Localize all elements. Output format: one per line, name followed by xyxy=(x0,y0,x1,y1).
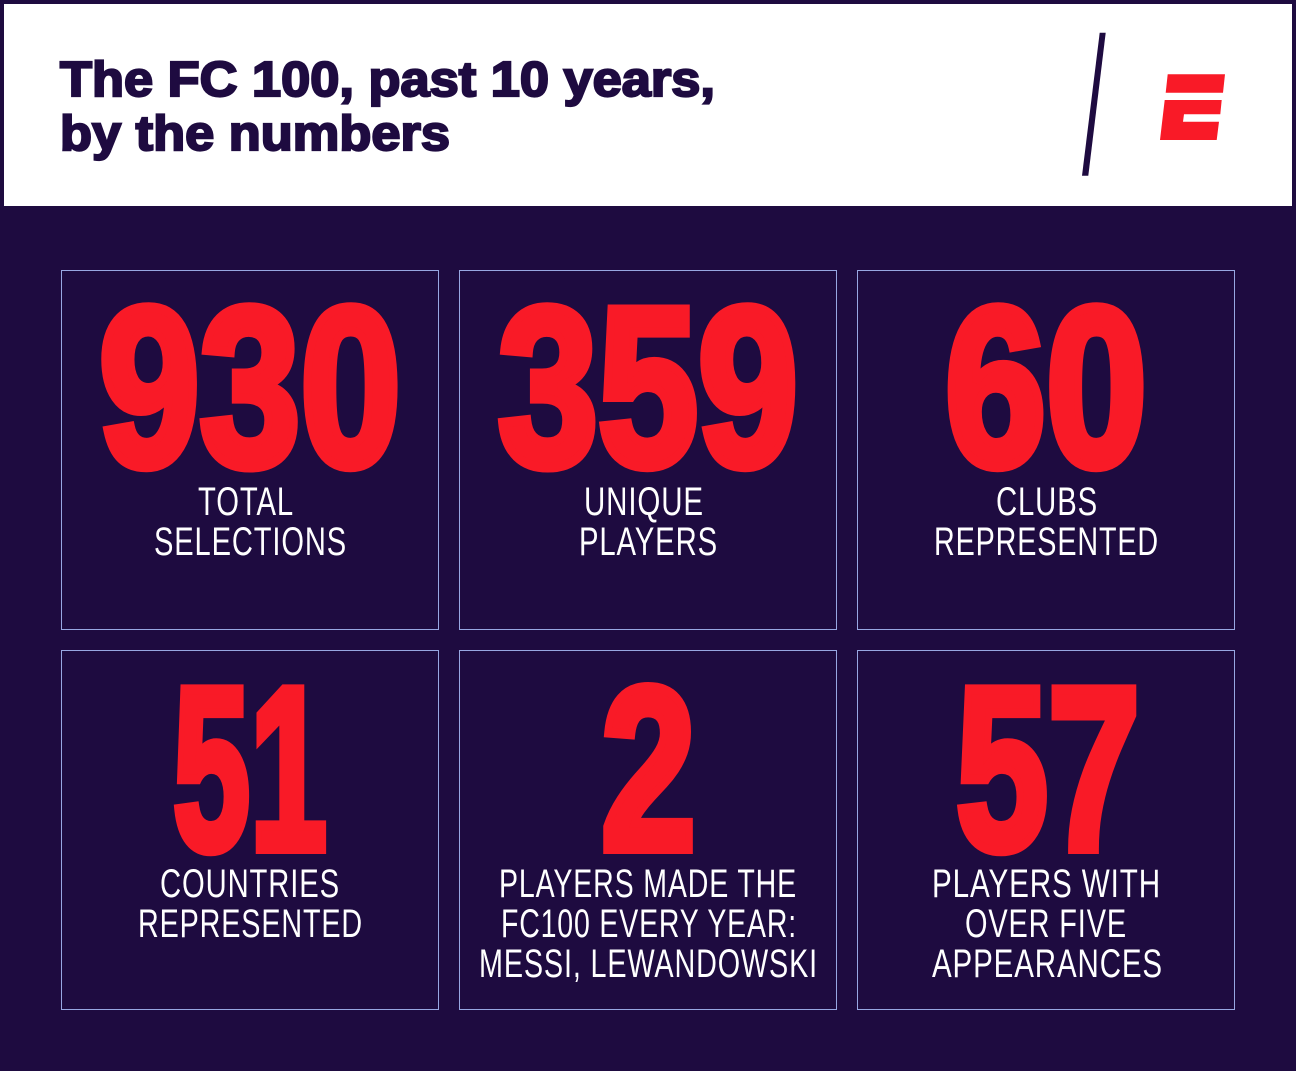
label: players with over five appearances: PLAYERS WITH xyxy=(932,862,1161,906)
label: unique players: UNIQUE xyxy=(584,480,704,524)
panel: players with over five appearances xyxy=(858,640,1234,1010)
number: 51: 51 xyxy=(173,640,327,899)
title: The FC 100, past 10 years, xyxy=(60,52,715,107)
divider slash xyxy=(1082,33,1106,176)
panel: players made the FC100 every year xyxy=(460,640,836,1010)
label: unique players xyxy=(579,480,718,564)
title: by the numbers xyxy=(60,106,450,161)
label: players made the FC100 every year: PLAYERS MADE THE xyxy=(499,862,797,906)
label: players made the FC100 every year: FC100 EVERY YEAR: xyxy=(501,902,797,946)
header band xyxy=(4,4,1292,206)
label: total selections: TOTAL xyxy=(198,480,294,524)
label: players with over five appearances: OVER FIVE xyxy=(965,902,1127,946)
panel: unique players xyxy=(460,260,836,630)
label: clubs represented: CLUBS xyxy=(996,480,1098,524)
panel: total selections xyxy=(62,260,438,630)
label: unique players: PLAYERS xyxy=(579,520,718,564)
label: total selections: SELECTIONS xyxy=(154,520,347,564)
title xyxy=(60,52,715,161)
label: players made the FC100 every year: MESSI, LEWANDOWSKI xyxy=(479,942,818,986)
panel: clubs represented xyxy=(858,260,1234,630)
label: clubs represented: REPRESENTED xyxy=(934,520,1159,564)
number: 930: 930 xyxy=(99,260,401,513)
number: 359: 359 xyxy=(498,260,798,513)
label: countries represented: REPRESENTED xyxy=(138,902,363,946)
icon: ESPN logo mark xyxy=(1160,74,1225,140)
label: players with over five appearances: APPEARANCES xyxy=(932,942,1163,986)
label: total selections xyxy=(154,480,347,564)
label: players with over five appearances xyxy=(932,862,1163,986)
label: countries represented xyxy=(138,862,363,946)
label: players made the FC100 every year xyxy=(479,862,818,986)
label: countries represented: COUNTRIES xyxy=(160,862,340,906)
number: 57: 57 xyxy=(956,640,1140,899)
panel: countries represented xyxy=(62,640,438,1010)
number: 60: 60 xyxy=(945,260,1147,513)
label: clubs represented xyxy=(934,480,1159,564)
number: 2: 2 xyxy=(601,640,696,899)
